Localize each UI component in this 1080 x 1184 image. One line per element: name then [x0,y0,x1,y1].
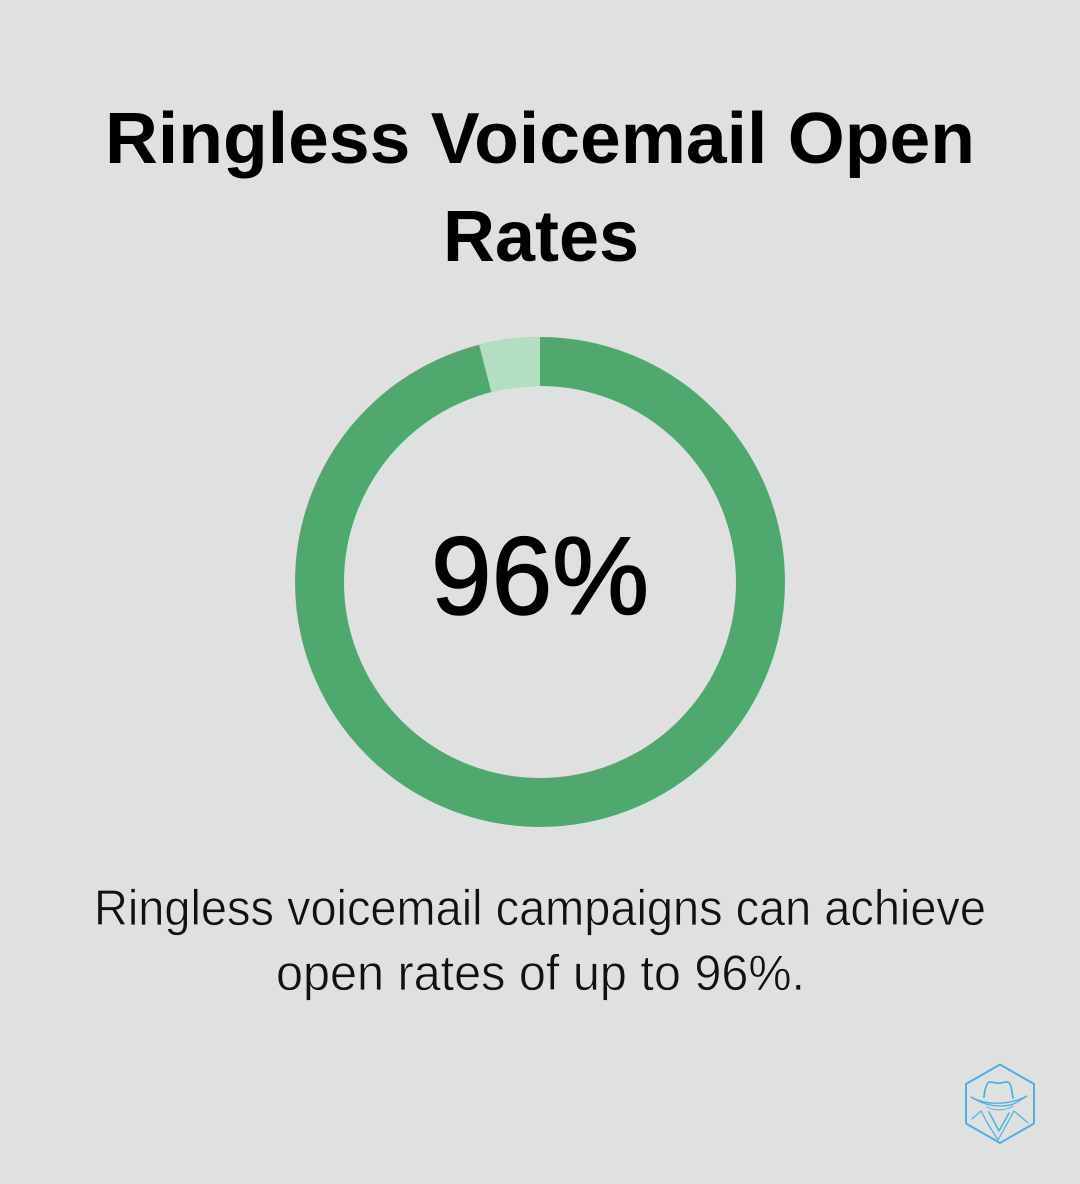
title: Rates [443,197,639,277]
title [105,99,975,277]
donut segment: remaining 4% [479,337,540,392]
icon: hexagon logo with spy hat [966,1064,1034,1143]
description text [94,880,986,1001]
description text: Ringless voicemail campaigns can achieve [94,880,986,936]
title: Ringless Voicemail Open [105,99,975,179]
donut chart: 96% [320,337,760,802]
center value: 96% [431,515,649,638]
description text: open rates of up to 96%. [276,945,805,1001]
